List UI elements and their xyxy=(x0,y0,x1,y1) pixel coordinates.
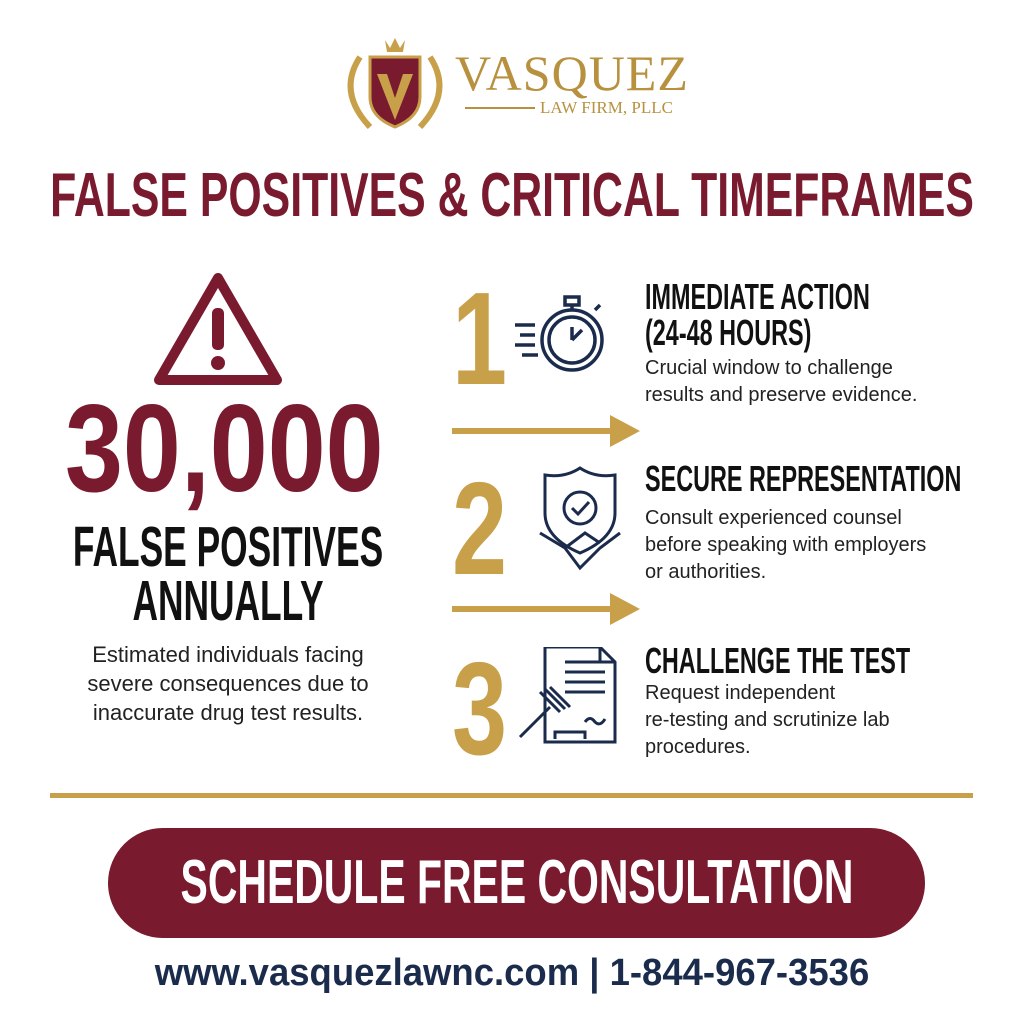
text: re-testing and scrutinize lab xyxy=(645,709,890,731)
text: or authorities. xyxy=(645,561,766,583)
logo: VASQUEZ xyxy=(455,45,689,101)
text: Request independent xyxy=(645,682,835,704)
stat description: severe consequences due to xyxy=(87,671,369,696)
step 3 xyxy=(452,635,910,782)
step 2 xyxy=(452,455,961,602)
contact: www.vasquezlawnc.com | 1-844-967-3536 xyxy=(155,952,869,994)
step 1 xyxy=(452,265,917,412)
big number: 30,000 xyxy=(65,380,384,518)
stat description: Estimated individuals facing xyxy=(92,642,364,667)
heading: (24-48 HOURS) xyxy=(645,312,811,353)
button: cta xyxy=(108,828,925,938)
icon: warning xyxy=(154,273,282,385)
heading: CHALLENGE THE TEST xyxy=(645,640,910,681)
arrow 2 xyxy=(452,593,640,625)
heading xyxy=(645,276,870,353)
stat label: ANNUALLY xyxy=(132,569,323,633)
button: cta: SCHEDULE FREE CONSULTATION xyxy=(180,848,853,917)
arrow 1 xyxy=(452,415,640,447)
logo: LAW FIRM, PLLC xyxy=(540,98,673,117)
icon: laurel xyxy=(351,57,439,127)
stat label: FALSE POSITIVES xyxy=(72,515,383,579)
text xyxy=(645,507,926,583)
text: before speaking with employers xyxy=(645,534,926,556)
text: results and preserve evidence. xyxy=(645,384,917,406)
icon: stopwatch xyxy=(515,295,604,372)
text: Consult experienced counsel xyxy=(645,507,902,529)
text xyxy=(645,357,917,406)
stat description xyxy=(87,642,369,725)
text: procedures. xyxy=(645,736,751,758)
panel: statistic xyxy=(65,273,384,725)
number 1: 1 xyxy=(452,265,507,412)
title: FALSE POSITIVES & CRITICAL TIMEFRAMES xyxy=(50,161,974,230)
stat description: inaccurate drug test results. xyxy=(93,700,363,725)
stat label xyxy=(72,515,383,633)
number 2: 2 xyxy=(452,455,507,602)
number 3: 3 xyxy=(452,635,507,782)
logo xyxy=(347,38,689,129)
text xyxy=(645,682,890,758)
icon: gavel document xyxy=(519,647,616,744)
heading: SECURE REPRESENTATION xyxy=(645,458,961,499)
text: Crucial window to challenge xyxy=(645,357,893,379)
icon: shield handshake xyxy=(539,466,621,570)
heading: IMMEDIATE ACTION xyxy=(645,276,870,317)
